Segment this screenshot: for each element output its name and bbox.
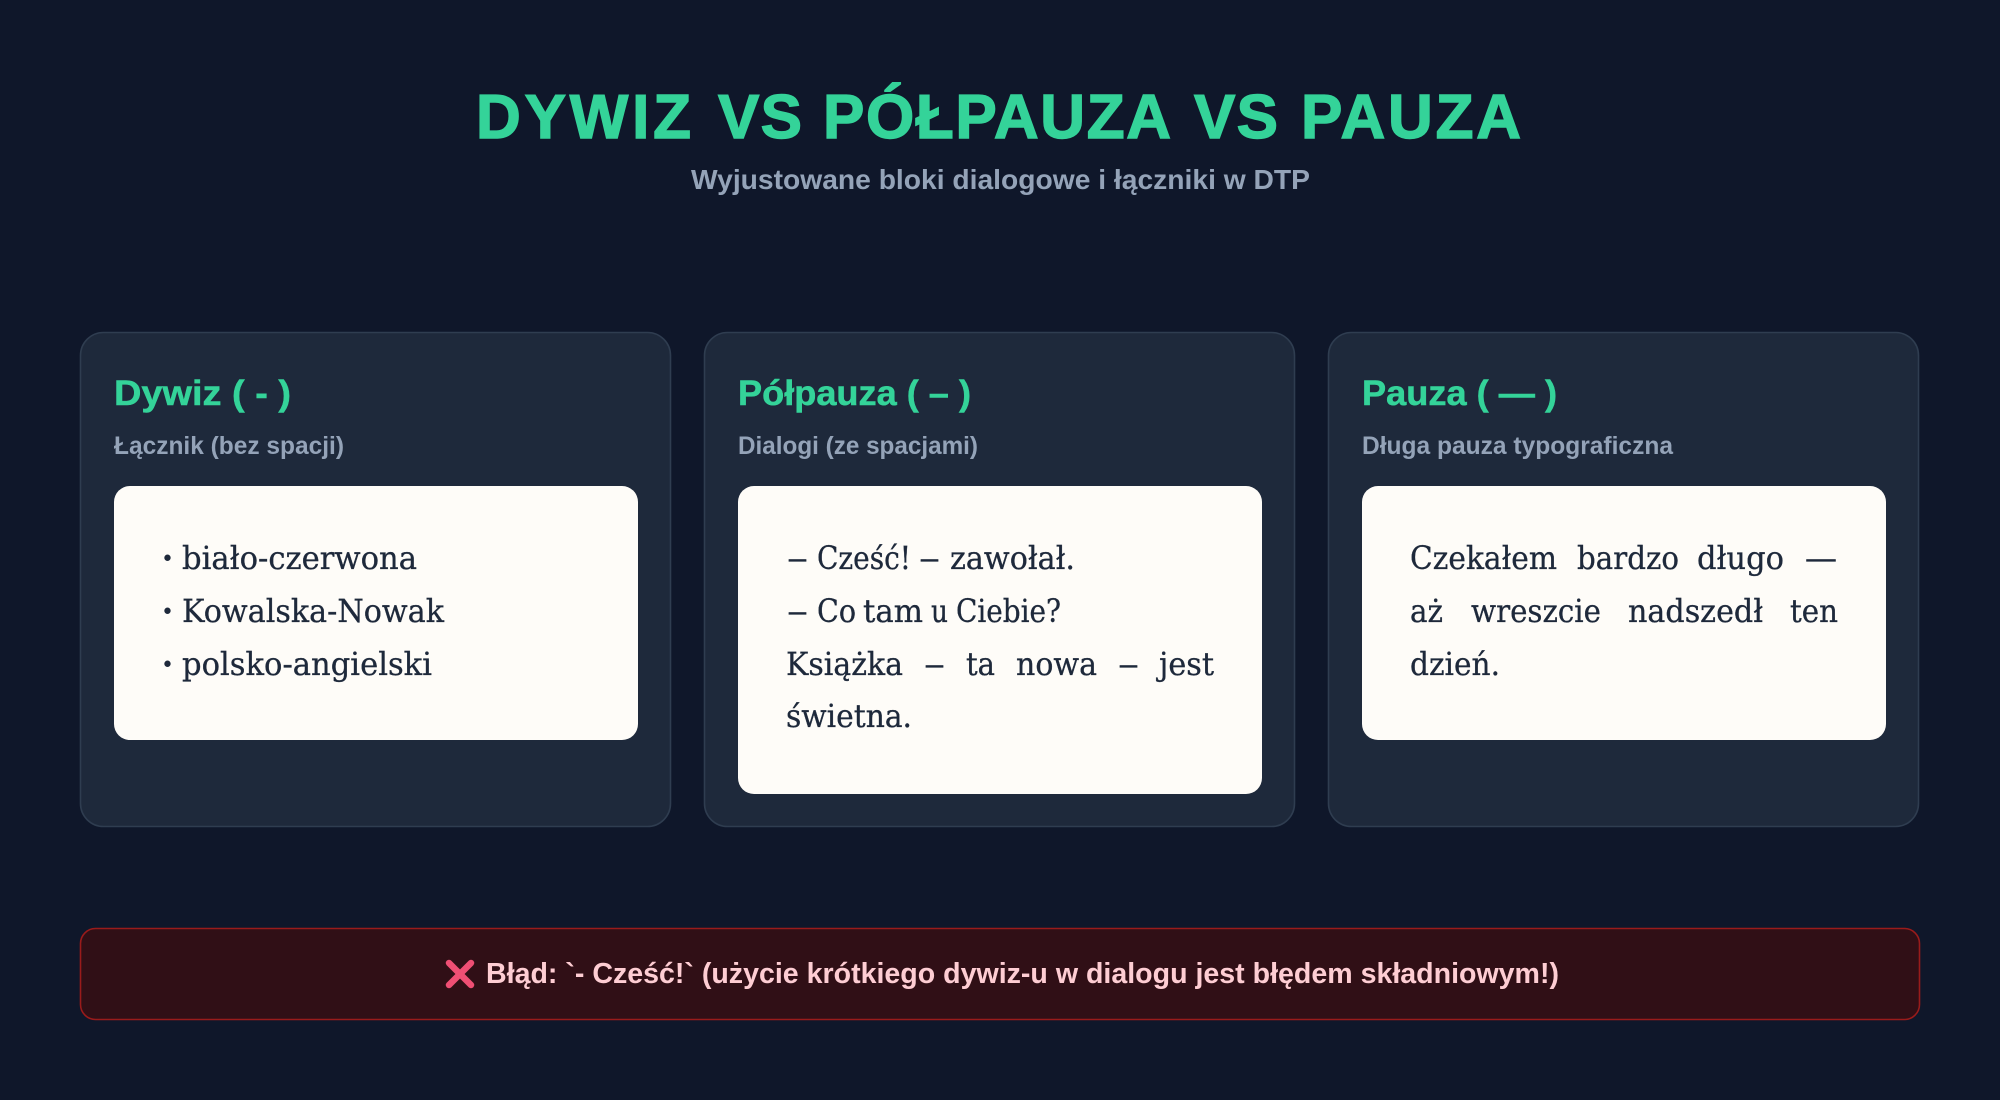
- text box: dialogue examples: Ciebie?: [956, 592, 1061, 630]
- text box: long dash example: Czekałem: [1410, 539, 1557, 577]
- text box: dialogue examples: [738, 486, 1262, 794]
- title: PÓŁPAUZA: [823, 83, 1171, 152]
- panel: Dywiz: [80, 332, 670, 826]
- panel: Półpauza: [704, 332, 1294, 826]
- text box: dialogue examples: ta: [966, 645, 995, 683]
- subheading: Dywiz: Łącznik (bez spacji): [114, 432, 344, 460]
- text box: long dash example: bardzo: [1577, 539, 1679, 577]
- text box: dialogue examples: –: [787, 539, 808, 577]
- icon: red cross: [449, 963, 471, 985]
- heading: Dywiz: Dywiz ( - ): [114, 374, 291, 413]
- text box: hyphen examples: [114, 486, 638, 740]
- text box: dialogue examples: zawołał.: [950, 539, 1075, 577]
- text box: hyphen examples: •: [161, 653, 174, 678]
- error callout: [80, 928, 1920, 1020]
- text box: hyphen examples: biało-czerwona: [182, 539, 417, 577]
- text box: hyphen examples: Kowalska-Nowak: [182, 592, 445, 630]
- text box: dialogue examples: Książka: [786, 645, 903, 683]
- text box: dialogue examples: u: [931, 592, 948, 630]
- card background: [704, 332, 1294, 826]
- text box: long dash example: długo: [1697, 539, 1784, 577]
- subheading: Pauza: Długa pauza typograficzna: [1362, 432, 1674, 460]
- heading: Pauza: Pauza ( — ): [1362, 374, 1557, 413]
- text box: dialogue examples: –: [924, 645, 945, 683]
- text box: dialogue examples: jest: [1155, 645, 1214, 683]
- text box: hyphen examples: •: [161, 600, 174, 625]
- title: DYWIZ: [476, 83, 691, 152]
- callout background: [80, 928, 1920, 1020]
- card background: [1328, 332, 1918, 826]
- title: PAUZA: [1301, 83, 1521, 152]
- text box: dialogue examples: tam: [863, 592, 923, 630]
- text box: dialogue examples: –: [1118, 645, 1139, 683]
- callout text: Błąd: `- Cześć!` (użycie krótkiego dywiz-u w dialogu jest błędem składniowym!): [486, 958, 1559, 990]
- panel: Pauza: [1328, 332, 1918, 826]
- title: [476, 83, 1521, 152]
- text box: dialogue examples: Co: [817, 592, 856, 630]
- title: VS: [718, 83, 802, 152]
- subheading: Półpauza: Dialogi (ze spacjami): [738, 432, 978, 460]
- text box: long dash example: dzień.: [1410, 645, 1500, 683]
- heading: Półpauza: Półpauza ( – ): [738, 374, 971, 413]
- text box: long dash example: ten: [1790, 592, 1838, 630]
- text box: hyphen examples: •: [161, 547, 174, 572]
- text box: hyphen examples: polsko-angielski: [182, 645, 432, 683]
- text box: dialogue examples: Cześć!: [817, 539, 911, 577]
- text box: dialogue examples: nowa: [1016, 645, 1097, 683]
- text box: long dash example: aż: [1410, 592, 1443, 630]
- subtitle: Wyjustowane bloki dialogowe i łączniki w DTP: [691, 164, 1310, 195]
- title: VS: [1194, 83, 1278, 152]
- text box: dialogue examples: –: [919, 539, 940, 577]
- text box: long dash example: wreszcie: [1471, 592, 1601, 630]
- text box: dialogue examples: świetna.: [786, 697, 912, 735]
- text box: dialogue examples: –: [787, 592, 808, 630]
- text box: long dash example: —: [1805, 539, 1837, 577]
- card background: [80, 332, 670, 826]
- text box: long dash example: [1362, 486, 1886, 740]
- text box: long dash example: nadszedł: [1628, 592, 1763, 630]
